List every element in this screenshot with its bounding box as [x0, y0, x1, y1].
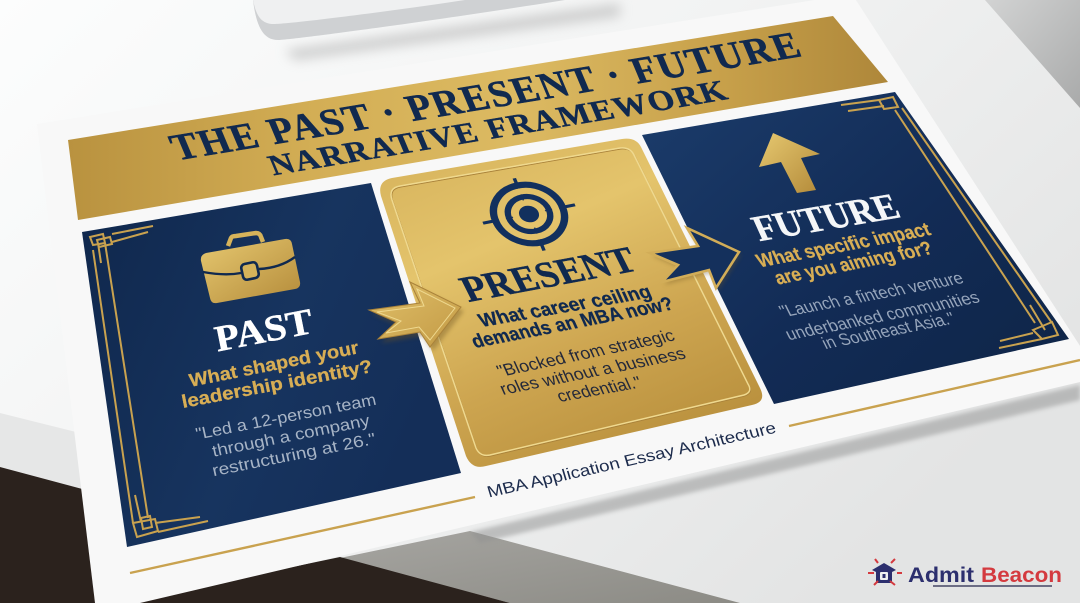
- footer caption: MBA Application Essay Architecture: [485, 419, 778, 501]
- present question: What career ceiling: [475, 282, 655, 332]
- past question: What shaped your: [187, 336, 360, 391]
- future heading: FUTURE: [745, 186, 906, 249]
- present question: demands an MBA now?: [468, 294, 677, 353]
- title line 1: THE PAST · PRESENT · FUTURE: [164, 24, 809, 169]
- arrow: past to present: [369, 282, 464, 351]
- icon: target: [468, 169, 590, 260]
- arrow: present to future: [650, 228, 741, 291]
- future quote: underbanked communities: [782, 288, 983, 344]
- present quote: credential.": [554, 373, 645, 406]
- future quote: in Southeast Asia.": [818, 309, 958, 353]
- past quote: [194, 391, 378, 480]
- future decorative corner border: [841, 97, 1058, 348]
- present quote: "Blocked from strategic: [494, 326, 678, 381]
- future question: What specific impact: [753, 219, 935, 272]
- title banner: [68, 16, 888, 220]
- title line 2: NARRATIVE FRAMEWORK: [263, 75, 733, 182]
- icon: beacon house: [868, 559, 902, 585]
- future quote: [776, 269, 983, 353]
- past decorative corner border: [90, 226, 208, 537]
- laptop corner: [253, 0, 620, 60]
- future question: are you aiming for?: [771, 238, 936, 289]
- logo wordmark: Beacon: Beacon: [981, 563, 1062, 587]
- present inner border: [391, 148, 751, 456]
- present quote: [494, 326, 689, 406]
- panel: future: [642, 92, 1069, 404]
- past quote: restructuring at 26.": [210, 430, 378, 480]
- icon: up arrow: [759, 133, 820, 193]
- footer rule left: [130, 497, 475, 573]
- past quote: "Led a 12-person team: [194, 391, 378, 443]
- footer rule right: [789, 360, 1080, 426]
- past question: leadership identity?: [180, 355, 374, 412]
- icon: briefcase: [201, 233, 300, 303]
- logo: Admit Beacon: [868, 559, 1062, 587]
- present heading: PRESENT: [454, 240, 644, 310]
- past heading: PAST: [211, 300, 316, 359]
- past quote: through a company: [210, 411, 372, 461]
- present quote: roles without a business: [497, 344, 689, 399]
- panel: present: [380, 139, 762, 467]
- logo underline: [933, 585, 1052, 587]
- logo wordmark: Admit: Admit: [908, 563, 974, 587]
- past question: [180, 336, 374, 412]
- panel: past: [82, 183, 461, 547]
- footer: [130, 360, 1080, 573]
- future quote: "Launch a fintech venture: [776, 269, 967, 321]
